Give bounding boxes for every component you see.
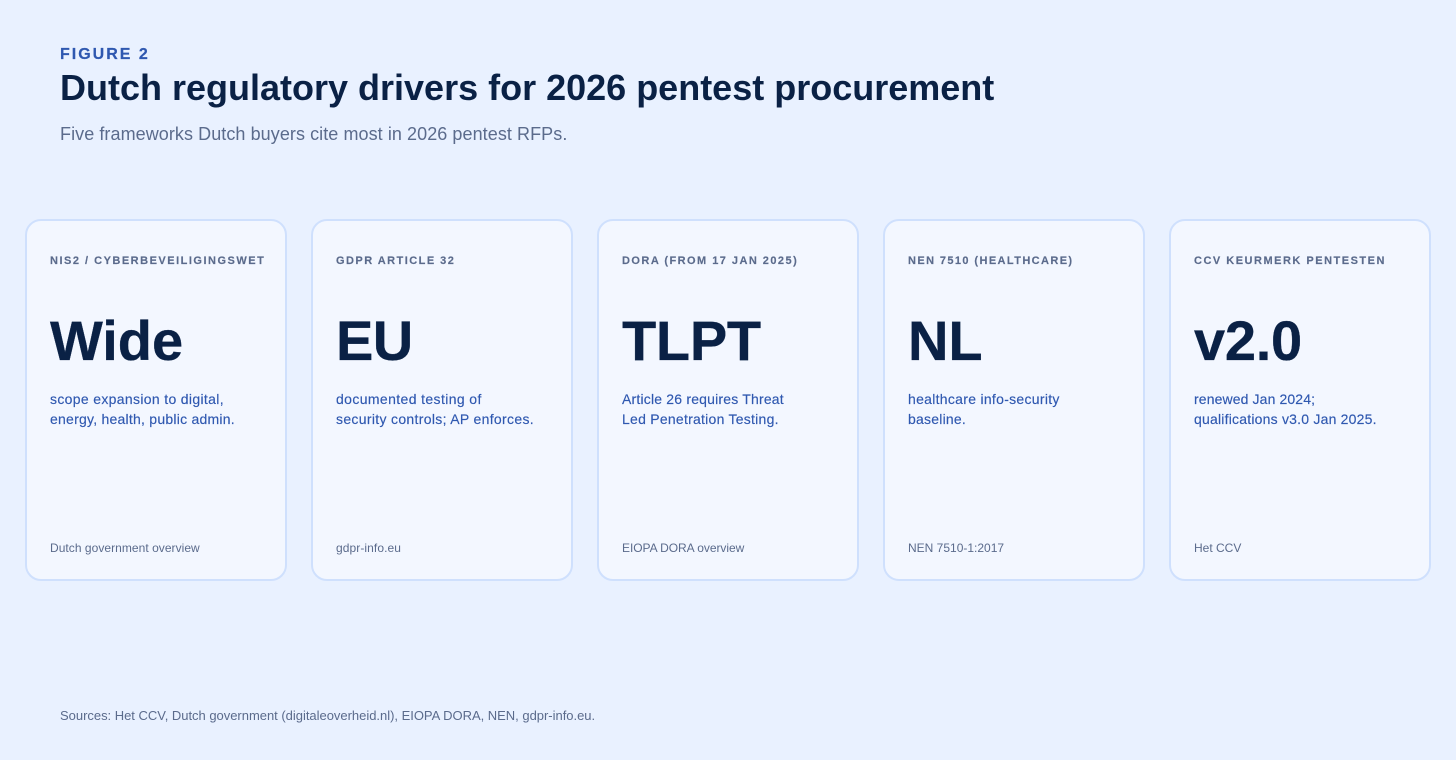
description: energy, health, public admin. [50,411,235,427]
description: documented testing of [336,391,482,407]
title: Dutch regulatory drivers for 2026 pentest procurement [60,67,994,108]
subtitle: Five frameworks Dutch buyers cite most in 2026 pentest RFPs. [60,124,567,144]
source: gdpr-info.eu [336,541,401,555]
panel: DORA [597,219,859,581]
panel: CCV [1169,219,1431,581]
big term: v2.0 [1194,309,1302,372]
big term: NL [908,309,983,372]
sources footnote: Sources: Het CCV, Dutch government (digitaleoverheid.nl), EIOPA DORA, NEN, gdpr-info.eu. [60,708,595,723]
description: security controls; AP enforces. [336,411,534,427]
description: Led Penetration Testing. [622,411,779,427]
source: EIOPA DORA overview [622,541,744,555]
description: scope expansion to digital, [50,391,224,407]
description [908,391,1060,427]
eyebrow: figure number: FIGURE 2 [60,46,150,63]
source: Dutch government overview [50,541,200,555]
description [1194,391,1377,428]
description [50,391,235,428]
big term: EU [336,309,413,372]
source: NEN 7510-1:2017 [908,541,1004,555]
description: Article 26 requires Threat [622,391,784,407]
panel: GDPR [311,219,573,581]
card label: DORA (FROM 17 JAN 2025) [622,255,798,267]
description [622,391,784,428]
card label: NEN 7510 (HEALTHCARE) [908,255,1074,267]
panel: NIS2 [25,219,287,581]
card label: GDPR ARTICLE 32 [336,255,455,267]
card label: NIS2 / CYBERBEVEILIGINGSWET [50,255,265,267]
description: healthcare info-security [908,391,1060,407]
description: renewed Jan 2024; [1194,391,1315,407]
source: Het CCV [1194,541,1241,555]
description: qualifications v3.0 Jan 2025. [1194,411,1377,427]
description: baseline. [908,411,966,427]
panel: NEN 7510 [883,219,1145,581]
description [336,391,534,428]
card label: CCV KEURMERK PENTESTEN [1194,255,1386,267]
big term: TLPT [622,309,761,372]
big term: Wide [50,309,183,372]
